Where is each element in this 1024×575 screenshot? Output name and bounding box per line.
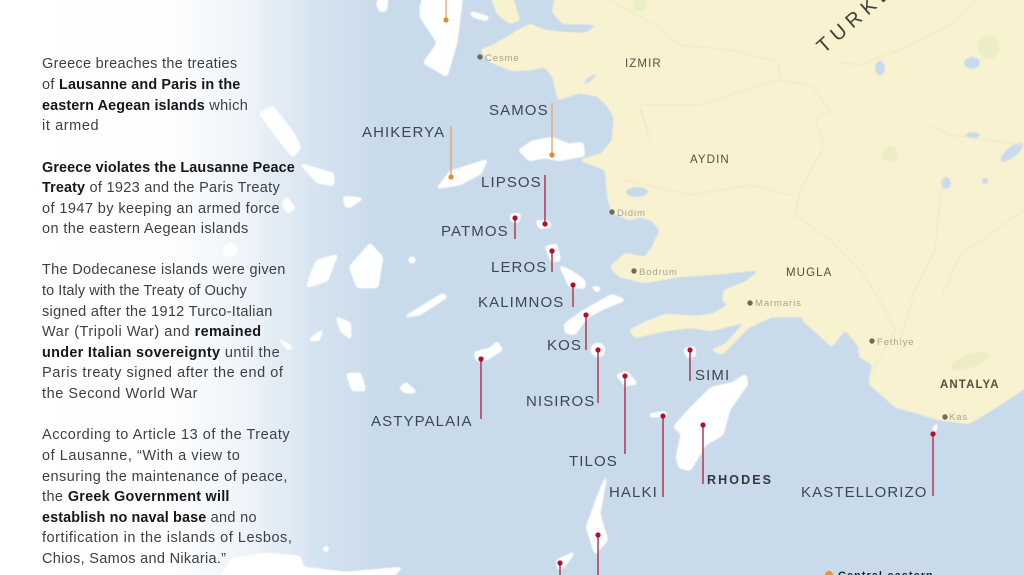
paragraph 3: signed after the 1912 Turco-Italian	[42, 304, 273, 320]
orange island markers	[443, 0, 555, 180]
paragraph 3: Paris treaty signed after the end of	[42, 365, 284, 381]
island labels: AHIKERYA	[362, 124, 445, 141]
city labels: Kas	[949, 412, 968, 423]
paragraph 2	[42, 160, 295, 237]
paragraph 3: the Second World War	[42, 386, 198, 402]
city labels: Marmaris	[755, 298, 802, 309]
city labels	[485, 53, 968, 423]
paragraph 1	[42, 56, 248, 134]
paragraph 3: The Dodecanese islands were given	[42, 262, 286, 278]
island labels: KALIMNOS	[478, 294, 564, 311]
island labels: TILOS	[569, 453, 618, 470]
island labels	[362, 102, 928, 501]
island labels: RHODES	[707, 473, 773, 487]
province labels: MUGLA	[786, 267, 832, 279]
red island markers	[478, 175, 936, 575]
province labels: AYDIN	[690, 154, 730, 166]
island labels: SIMI	[695, 367, 730, 384]
islands	[218, 0, 938, 575]
paragraph 4: establish no naval base and no	[42, 510, 257, 526]
island labels: ASTYPALAIA	[371, 413, 473, 430]
city labels: Cesme	[485, 53, 520, 64]
paragraph 3: under Italian sovereignty until the	[42, 345, 280, 361]
paragraph 4	[42, 427, 292, 567]
paragraph 4: fortification in the islands of Lesbos,	[42, 530, 292, 546]
island labels: LEROS	[491, 259, 547, 276]
paragraph 4: of Lausanne, “With a view to	[42, 448, 240, 464]
province labels: IZMIR	[625, 58, 662, 70]
paragraph 2: of 1947 by keeping an armed force	[42, 201, 280, 217]
island labels: NISIROS	[526, 393, 595, 410]
island labels: LIPSOS	[481, 174, 542, 191]
city labels: Fethiye	[877, 337, 914, 348]
province labels: ANTALYA	[940, 379, 1000, 391]
province labels	[625, 58, 1000, 391]
paragraph 2: Treaty of 1923 and the Paris Treaty	[42, 180, 280, 196]
city labels: Didim	[617, 208, 646, 219]
paragraph 1: it armed	[42, 118, 99, 134]
island labels: HALKI	[609, 484, 658, 501]
island labels: PATMOS	[441, 223, 509, 240]
provincial borders	[610, 0, 1024, 375]
paragraph 2: on the eastern Aegean islands	[42, 221, 249, 237]
white fade at left	[0, 0, 380, 575]
paragraph 1: Greece breaches the treaties	[42, 56, 237, 72]
paragraph 4: ensuring the maintenance of peace,	[42, 469, 288, 485]
paragraph 4: Chios, Samos and Nikaria.”	[42, 551, 226, 567]
land: Turkey	[480, 0, 1024, 424]
paragraph 4: According to Article 13 of the Treaty	[42, 427, 290, 443]
lakes	[583, 57, 1024, 197]
paragraph 1: eastern Aegean islands which	[42, 98, 248, 114]
island labels: KOS	[547, 337, 582, 354]
paragraph 2: Greece violates the Lausanne Peace	[42, 160, 295, 176]
island labels: KASTELLORIZO	[801, 484, 928, 501]
paragraph 3: War (Tripoli War) and remained	[42, 324, 261, 340]
island labels: SAMOS	[489, 102, 549, 119]
paragraph 3: to Italy with the Treaty of Ouchy	[42, 283, 247, 299]
green patches	[632, 0, 1000, 374]
city markers	[477, 54, 948, 420]
paragraph 1: of Lausanne and Paris in the	[42, 77, 240, 93]
city labels: Bodrum	[639, 267, 678, 278]
paragraph 4: the Greek Government will	[42, 489, 230, 505]
paragraph 3	[42, 262, 286, 402]
